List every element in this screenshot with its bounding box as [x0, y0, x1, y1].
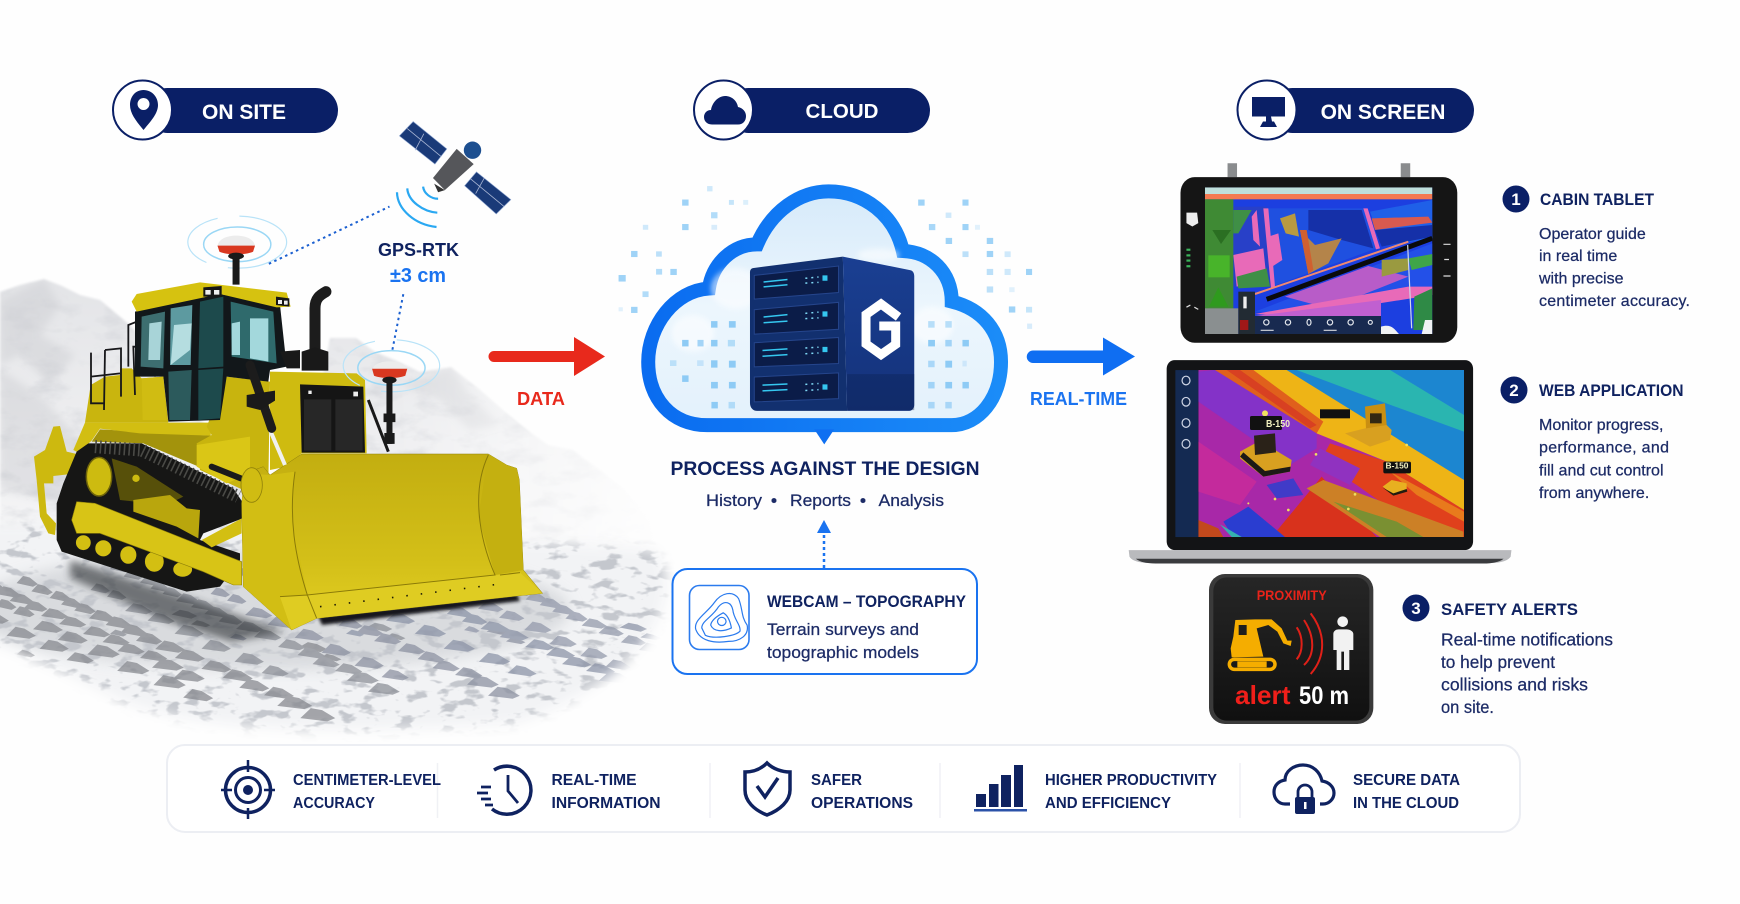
dotted arrow up	[817, 520, 831, 568]
feature: web application: fill and cut control	[1539, 462, 1664, 480]
benefit: secure: SECURE DATA	[1353, 772, 1460, 789]
device: safety alert: alert	[1235, 680, 1291, 710]
tablet screen	[1205, 187, 1432, 334]
feature: safety alerts: 3	[1411, 599, 1421, 618]
icon: pin	[130, 90, 158, 130]
text: history reports analysis: Analysis	[878, 491, 944, 510]
icon: contour map	[690, 586, 749, 650]
header: cloud: CLOUD	[806, 100, 878, 123]
feature: web application	[1500, 376, 1684, 502]
benefit: real time: REAL-TIME	[552, 772, 636, 789]
person icon	[1333, 616, 1353, 670]
panel: webcam topography: topographic models	[767, 643, 919, 662]
mountains backdrop	[0, 278, 594, 538]
benefit: accuracy: CENTIMETER-LEVEL	[293, 772, 441, 789]
arrow: data: DATA	[517, 389, 565, 409]
tablet antennas	[1228, 163, 1410, 177]
feature: safety alerts: SAFETY ALERTS	[1441, 601, 1578, 619]
machine labels: B-150	[1266, 419, 1290, 430]
GPS-RTK label: ±3 cm	[390, 265, 446, 287]
engine hood	[270, 372, 367, 470]
feature: web application: from anywhere.	[1539, 485, 1649, 502]
server	[750, 257, 914, 411]
exhaust	[280, 292, 328, 371]
rocky ground	[0, 520, 672, 736]
feature: safety alerts: on site.	[1441, 697, 1494, 717]
feature: web application: performance, and	[1539, 440, 1669, 456]
benefit: accuracy	[221, 760, 441, 819]
panel: webcam topography	[672, 569, 977, 674]
heading: process against the design: PROCESS AGAINST THE DESIGN	[670, 458, 980, 480]
panel: webcam topography: Terrain surveys and	[767, 620, 919, 639]
cloud illustration	[619, 186, 1032, 444]
arrow: real-time	[1027, 338, 1135, 409]
benefit: safer: OPERATIONS	[811, 795, 913, 812]
rear body	[73, 368, 270, 490]
text: history reports analysis: •	[860, 491, 866, 510]
feature: cabin tablet: Operator guide	[1539, 226, 1646, 243]
benefit: secure	[1274, 765, 1460, 814]
header: cloud	[694, 80, 930, 140]
blade	[241, 454, 543, 630]
track	[57, 443, 243, 592]
feature: safety alerts: to help prevent	[1441, 652, 1555, 672]
logo G	[866, 304, 899, 355]
icon: shield	[745, 763, 790, 815]
header: on screen: ON SCREEN	[1321, 101, 1445, 124]
data squares	[619, 186, 1032, 329]
feature: cabin tablet: 1	[1511, 190, 1521, 209]
feature: web application: 2	[1509, 381, 1519, 400]
icon: clock	[477, 766, 531, 814]
feature: safety alerts: Real-time notifications	[1441, 630, 1613, 650]
icon: monitor	[1252, 97, 1285, 127]
benefit: safer	[745, 763, 913, 815]
feature: web application: WEB APPLICATION	[1539, 382, 1684, 400]
heatmap	[1198, 370, 1464, 537]
rocks	[0, 568, 656, 722]
device: safety alert	[1209, 574, 1373, 724]
benefit: productivity: AND EFFICIENCY	[1045, 795, 1172, 812]
front antenna	[188, 216, 287, 285]
machines on map	[1240, 403, 1407, 496]
feature: web application: Monitor progress,	[1539, 417, 1664, 434]
inner squares	[670, 321, 969, 408]
laptop base	[1129, 550, 1511, 563]
panel: benefits bar	[167, 745, 1520, 832]
arrow: real-time: REAL-TIME	[1030, 389, 1127, 409]
feature: cabin tablet: in real time	[1539, 248, 1617, 265]
feature: cabin tablet: CABIN TABLET	[1540, 191, 1654, 209]
icon: bars	[974, 765, 1027, 812]
dotted links	[269, 207, 403, 351]
app sidebar	[1175, 370, 1198, 537]
header: on site	[113, 80, 338, 140]
hoses	[368, 400, 388, 452]
antenna signals and receivers	[188, 122, 511, 444]
rear antenna	[343, 340, 440, 444]
feature: cabin tablet: with precise	[1538, 270, 1624, 288]
header: on site: ON SITE	[202, 101, 286, 124]
excavator icon	[1229, 619, 1292, 669]
panel: webcam topography: WEBCAM – TOPOGRAPHY	[767, 593, 966, 611]
rollers	[75, 535, 193, 577]
icon: cloud	[704, 96, 746, 124]
benefit: real time	[477, 766, 660, 814]
device: laptop: B-150	[1386, 460, 1409, 470]
feature: cabin tablet	[1502, 186, 1690, 310]
icon: cloud lock	[1274, 765, 1334, 814]
text: history reports analysis: History	[706, 491, 763, 510]
warning arcs	[1297, 613, 1322, 674]
cloud tail	[814, 429, 834, 444]
satellite	[399, 122, 511, 214]
benefit: productivity: HIGHER PRODUCTIVITY	[1045, 772, 1218, 789]
benefit: safer: SAFER	[811, 772, 862, 789]
ground shadow	[70, 560, 520, 642]
signal arcs	[397, 187, 438, 227]
bulldozer	[34, 282, 543, 630]
arrow: data	[488, 337, 605, 409]
benefit: secure: IN THE CLOUD	[1353, 795, 1459, 812]
feature: safety alerts	[1402, 594, 1613, 717]
GPS-RTK label	[378, 239, 460, 287]
device: laptop	[1129, 360, 1511, 564]
feature: safety alerts: collisions and risks	[1441, 674, 1588, 694]
GPS-RTK label: GPS-RTK	[378, 239, 460, 260]
push arm	[72, 502, 242, 585]
inner puffs	[671, 248, 954, 352]
lift cylinder	[247, 365, 285, 465]
ripper	[34, 426, 77, 535]
icon: target	[221, 760, 275, 819]
text: history reports analysis	[706, 491, 944, 510]
header: on screen	[1238, 80, 1474, 140]
text: history reports analysis: Reports	[790, 491, 851, 510]
cloud shape	[648, 191, 1001, 425]
benefit: real time: INFORMATION	[552, 795, 660, 812]
benefit: productivity	[974, 765, 1218, 812]
handrails	[91, 322, 155, 410]
laptop lid	[1167, 360, 1473, 550]
device: cabin tablet	[1180, 163, 1457, 343]
device: safety alert: PROXIMITY	[1257, 587, 1327, 603]
cab	[132, 282, 291, 422]
feature: cabin tablet: centimeter accuracy.	[1539, 293, 1690, 310]
benefit: accuracy: ACCURACY	[293, 795, 376, 812]
text: history reports analysis: •	[771, 491, 777, 510]
device: safety alert: 50 m	[1299, 682, 1349, 710]
